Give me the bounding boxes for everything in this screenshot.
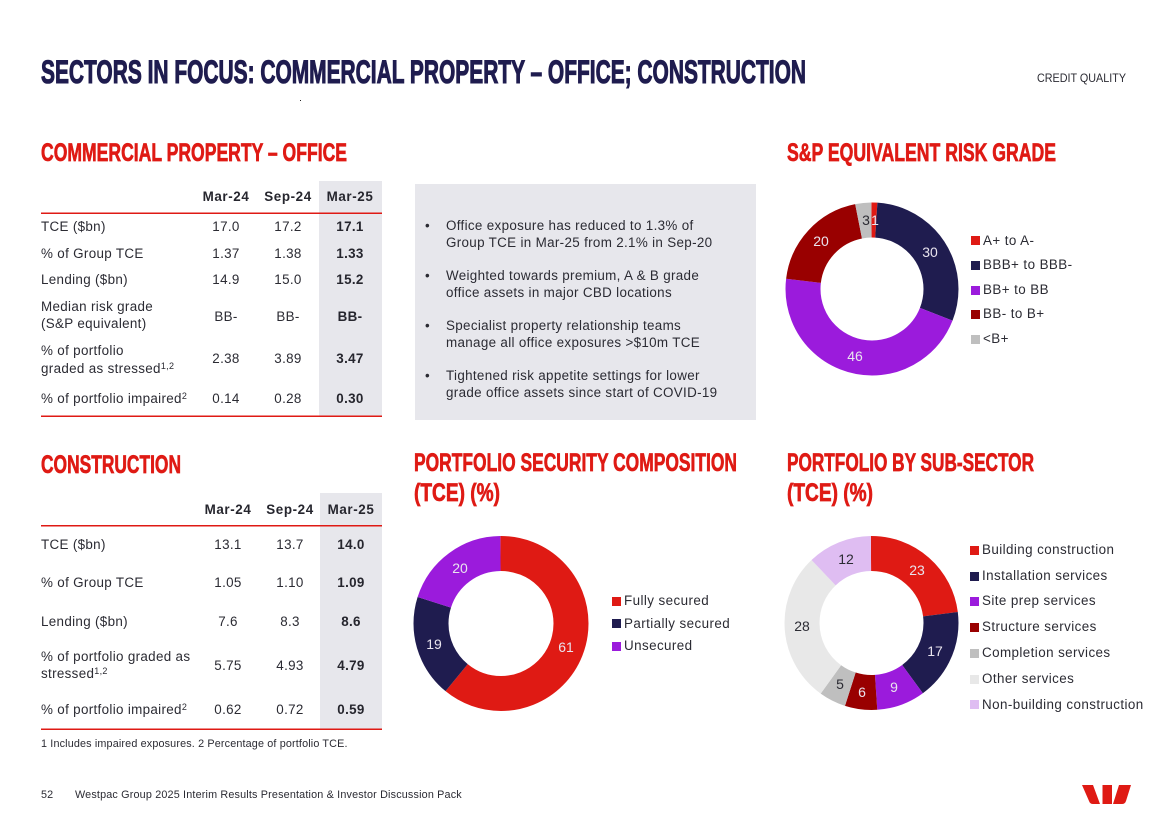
donut chart: risk grade: 1 xyxy=(871,212,879,228)
table: construction: 0.62 xyxy=(214,702,242,717)
heading: security composition xyxy=(414,449,737,507)
heading: security composition: (TCE) (%) xyxy=(414,479,500,507)
donut chart: risk grade: 20 xyxy=(813,233,829,249)
table: commercial property office: % of Group TCE xyxy=(41,246,144,261)
donut chart: sub-sector: 12 xyxy=(838,551,854,567)
panel: key points xyxy=(415,184,756,420)
donut chart: sub-sector: 6 xyxy=(858,684,866,700)
panel: key points: Office exposure has reduced to 1.3% of xyxy=(446,218,694,233)
table: construction: 8.6 xyxy=(341,614,361,629)
panel: key points: Tightened risk appetite settings for lower xyxy=(446,368,700,383)
legend: risk grade: BB- to B+ xyxy=(983,306,1044,321)
table: commercial property office: % of portfolio impaired xyxy=(41,391,182,406)
table: commercial property office xyxy=(41,181,382,417)
heading: construction: CONSTRUCTION xyxy=(41,451,181,479)
footer: page number and source: Westpac Group 2025 Interim Results Presentation & Investor Discussion Pack xyxy=(75,789,462,801)
panel: key points: office assets in major CBD locations xyxy=(446,285,672,300)
table: commercial property office: % of portfolio xyxy=(41,343,124,358)
table: construction: 1.09 xyxy=(337,575,365,590)
table: commercial property office: Lending ($bn) xyxy=(41,272,128,287)
heading: sub-sector: PORTFOLIO BY SUB-SECTOR xyxy=(787,449,1034,477)
table: construction: % of portfolio graded as xyxy=(41,649,190,664)
table: commercial property office: 17.1 xyxy=(336,219,364,234)
panel: key points: Weighted towards premium, A & B grade xyxy=(446,268,699,283)
table: construction: Mar-25 xyxy=(328,502,374,517)
legend: security composition: Unsecured xyxy=(624,638,693,653)
table: commercial property office: Median risk grade xyxy=(41,299,153,314)
donut chart: risk grade: 30 xyxy=(922,244,938,260)
legend: sub-sector: Non-building construction xyxy=(982,697,1144,712)
donut chart: sub-sector: 9 xyxy=(890,679,898,695)
footer: page number and source: 52 xyxy=(41,789,53,801)
table: commercial property office: 17.0 xyxy=(212,219,240,234)
table: commercial property office: 1.37 xyxy=(212,246,240,261)
table: construction: 4.93 xyxy=(276,658,304,673)
table: commercial property office: (S&P equivalent) xyxy=(41,316,147,331)
donut chart: sub-sector xyxy=(794,551,943,700)
heading: sub-sector: (TCE) (%) xyxy=(787,479,873,507)
donut chart: sub-sector: 28 xyxy=(794,618,810,634)
panel: key points: grade office assets since start of COVID-19 xyxy=(446,385,717,400)
table: construction: Mar-24 xyxy=(205,502,251,517)
legend: security composition xyxy=(612,593,730,653)
legend: sub-sector: Other services xyxy=(982,671,1074,686)
legend: security composition: Partially secured xyxy=(624,616,730,631)
table: construction: 1.10 xyxy=(276,575,304,590)
table: construction: 2 xyxy=(182,702,187,712)
table: construction: % of portfolio impaired xyxy=(41,702,182,717)
footnote: 1 Includes impaired exposures. 2 Percentage of portfolio TCE. xyxy=(41,738,348,750)
table: construction: Lending ($bn) xyxy=(41,614,128,629)
table: commercial property office: Mar-25 xyxy=(327,189,373,204)
table: construction: Sep-24 xyxy=(266,502,314,517)
legend: risk grade: <B+ xyxy=(983,331,1009,346)
table: construction: 1,2 xyxy=(94,666,108,676)
donut chart: risk grade: 46 xyxy=(847,348,863,364)
legend: risk grade: BB+ to BB xyxy=(983,282,1049,297)
panel: key points: Group TCE in Mar-25 from 2.1% in Sep-20 xyxy=(446,235,712,250)
donut chart: security composition: 20 xyxy=(452,560,468,576)
logo: Westpac W xyxy=(1082,785,1131,804)
heading: commercial property office: COMMERCIAL PROPERTY – OFFICE xyxy=(41,139,347,167)
table: construction: 5.75 xyxy=(214,658,242,673)
table: construction: 13.7 xyxy=(276,537,304,552)
table: construction: 14.0 xyxy=(337,537,365,552)
table: commercial property office: 3.47 xyxy=(336,351,364,366)
panel: key points: Specialist property relationship teams xyxy=(446,318,681,333)
panel: key points: manage all office exposures >$10m TCE xyxy=(446,335,700,350)
donut chart: sub-sector: 5 xyxy=(836,676,844,692)
table: commercial property office: 15.2 xyxy=(336,272,364,287)
panel: key points: • xyxy=(425,368,430,383)
table: construction: 0.59 xyxy=(337,702,365,717)
table: construction: % of Group TCE xyxy=(41,575,144,590)
table: commercial property office: graded as stressed xyxy=(41,361,161,376)
donut chart: risk grade xyxy=(803,212,941,364)
donut chart: risk grade: 3 xyxy=(862,212,870,228)
table: construction: 0.72 xyxy=(276,702,304,717)
table: commercial property office: TCE ($bn) xyxy=(41,219,106,234)
legend: sub-sector: Site prep services xyxy=(982,593,1096,608)
donut chart: security composition: 19 xyxy=(426,636,442,652)
donut chart: sub-sector: 23 xyxy=(909,562,925,578)
donut chart: security composition xyxy=(426,554,574,694)
table: commercial property office: 0.28 xyxy=(274,391,302,406)
table: commercial property office: 1.33 xyxy=(336,246,364,261)
table: construction: 4.79 xyxy=(337,658,365,673)
table: commercial property office: 3.89 xyxy=(274,351,302,366)
table: commercial property office: 2 xyxy=(182,391,187,401)
table: construction: 1.05 xyxy=(214,575,242,590)
legend: sub-sector: Building construction xyxy=(982,542,1114,557)
table: commercial property office: 1,2 xyxy=(161,361,174,371)
table: construction: 7.6 xyxy=(218,614,238,629)
table: commercial property office: Mar-24 xyxy=(203,189,249,204)
table: commercial property office: BB- xyxy=(214,309,238,324)
panel: key points: • xyxy=(425,318,430,333)
donut chart: security composition: 61 xyxy=(558,639,574,655)
donut chart: sub-sector: 17 xyxy=(927,643,943,659)
legend: risk grade xyxy=(971,233,1073,346)
panel: key points: • xyxy=(425,218,430,233)
table: commercial property office: 2.38 xyxy=(212,351,240,366)
heading: risk grade: S&P EQUIVALENT RISK GRADE xyxy=(787,139,1056,167)
legend: security composition: Fully secured xyxy=(624,593,709,608)
legend: sub-sector: Completion services xyxy=(982,645,1111,660)
table: construction: stressed xyxy=(41,666,94,681)
table: construction: 13.1 xyxy=(214,537,242,552)
legend: sub-sector xyxy=(970,542,1144,712)
table: commercial property office: 0.14 xyxy=(212,391,240,406)
table: commercial property office: 17.2 xyxy=(274,219,302,234)
table: commercial property office: Sep-24 xyxy=(264,189,312,204)
table: commercial property office: 14.9 xyxy=(212,272,240,287)
table: commercial property office: 15.0 xyxy=(274,272,302,287)
table: construction xyxy=(41,493,382,730)
legend: risk grade: A+ to A- xyxy=(983,233,1034,248)
table: construction: TCE ($bn) xyxy=(41,537,106,552)
legend: sub-sector: Installation services xyxy=(982,568,1108,583)
table: commercial property office: BB- xyxy=(276,309,300,324)
table: commercial property office: 1.38 xyxy=(274,246,302,261)
heading: security composition: PORTFOLIO SECURITY COMPOSITION xyxy=(414,449,737,477)
table: commercial property office: 0.30 xyxy=(336,391,364,406)
panel: key points: • xyxy=(425,268,430,283)
section tag: credit quality: CREDIT QUALITY xyxy=(1037,73,1126,85)
table: commercial property office: BB- xyxy=(338,309,362,324)
legend: sub-sector: Structure services xyxy=(982,619,1097,634)
table: construction: 8.3 xyxy=(280,614,300,629)
heading: sub-sector xyxy=(787,449,1034,507)
legend: risk grade: BBB+ to BBB- xyxy=(983,257,1073,272)
